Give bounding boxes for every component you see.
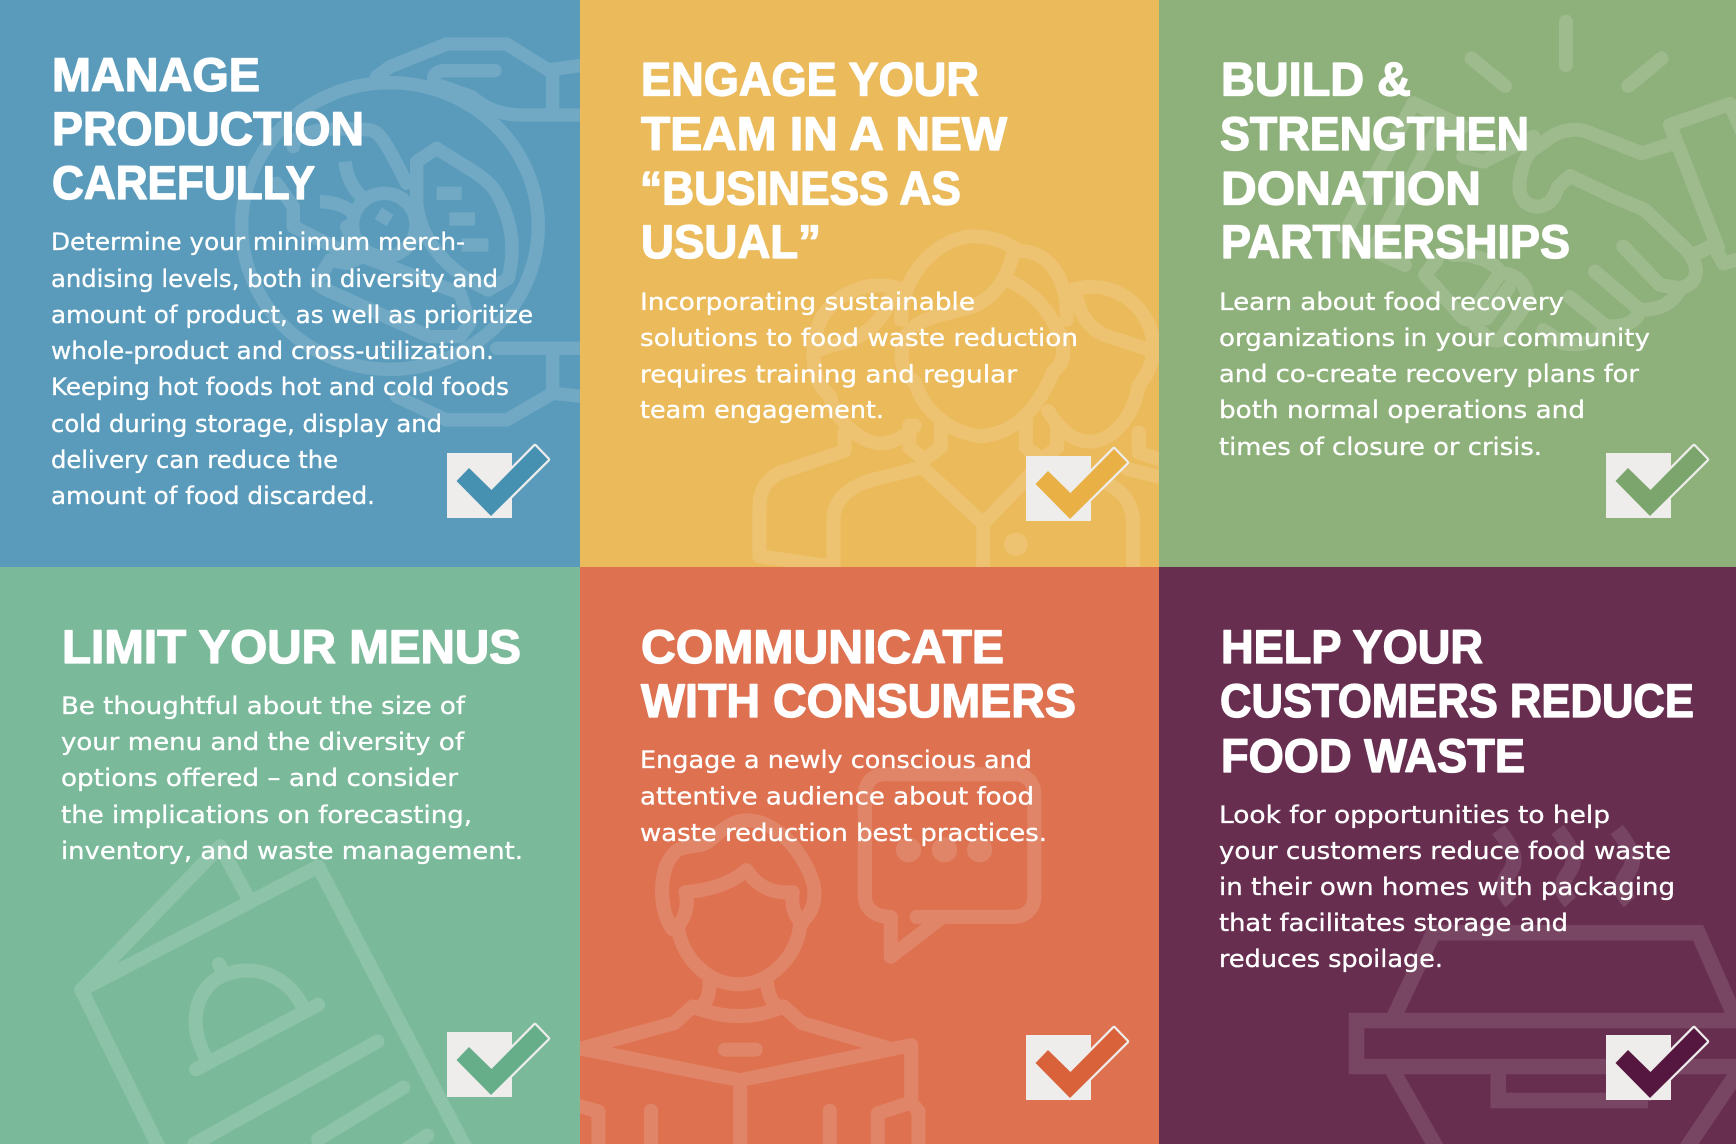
icon: check box bbox=[1606, 446, 1707, 518]
panel: manage production carefully bbox=[0, 0, 583, 567]
heading: LIMIT YOUR MENUS bbox=[62, 620, 521, 673]
heading: WITH CONSUMERS bbox=[641, 674, 1076, 727]
icon: check box bbox=[1026, 1028, 1127, 1100]
body text: reduces spoilage. bbox=[1219, 945, 1443, 973]
body text bbox=[640, 288, 1078, 424]
heading bbox=[640, 52, 1008, 268]
body text: requires training and regular bbox=[640, 360, 1017, 388]
body text: andising levels, both in diversity and bbox=[51, 265, 498, 293]
panel: help your customers reduce food waste bbox=[1159, 567, 1736, 1144]
heading: MANAGE bbox=[52, 48, 260, 101]
body text: times of closure or crisis. bbox=[1219, 433, 1542, 461]
body text: organizations in your community bbox=[1219, 324, 1650, 352]
icon: check box bbox=[447, 446, 548, 518]
body text: Be thoughtful about the size of bbox=[61, 692, 466, 720]
heading bbox=[1220, 620, 1694, 782]
body text: team engagement. bbox=[640, 396, 884, 424]
heading: TEAM IN A NEW bbox=[641, 107, 1008, 160]
icon: check box bbox=[1026, 449, 1127, 521]
heading: BUILD & bbox=[1221, 52, 1411, 106]
body text: Engage a newly conscious and bbox=[640, 746, 1032, 774]
body text bbox=[1219, 801, 1675, 973]
heading: USUAL” bbox=[641, 215, 821, 268]
heading bbox=[641, 620, 1076, 727]
icon: steaming food container bbox=[1357, 830, 1736, 1144]
heading: PARTNERSHIPS bbox=[1221, 215, 1570, 268]
body text: both normal operations and bbox=[1219, 396, 1585, 424]
body text: Incorporating sustainable bbox=[640, 288, 975, 316]
body text: Determine your minimum merch- bbox=[51, 228, 465, 256]
heading: FOOD WASTE bbox=[1221, 729, 1525, 782]
heading bbox=[1220, 52, 1570, 268]
icon: check box bbox=[1606, 1028, 1707, 1100]
body text: that facilitates storage and bbox=[1219, 909, 1568, 937]
icon: hands holding produce bbox=[242, 44, 583, 420]
body text: Look for opportunities to help bbox=[1219, 801, 1610, 829]
body text: cold during storage, display and bbox=[51, 410, 442, 438]
body text bbox=[51, 228, 533, 510]
body text: the implications on forecasting, bbox=[61, 801, 472, 829]
panel: limit your menus bbox=[0, 567, 580, 1144]
panel: communicate with consumers bbox=[573, 567, 1159, 1144]
icon: menu with cloche bbox=[81, 846, 477, 1144]
body text: your menu and the diversity of bbox=[61, 728, 465, 756]
body text: whole-product and cross-utilization. bbox=[51, 337, 494, 365]
heading bbox=[52, 48, 364, 209]
panel: build and strengthen donation partnerships bbox=[1159, 0, 1736, 567]
body text: amount of product, as well as prioritize bbox=[51, 301, 533, 329]
body text: amount of food discarded. bbox=[51, 482, 375, 510]
heading: COMMUNICATE bbox=[641, 620, 1004, 673]
icon: person with box and speech bubble bbox=[573, 774, 1034, 1144]
body text bbox=[1219, 288, 1650, 461]
panel: engage your team bbox=[580, 0, 1172, 582]
heading: HELP YOUR bbox=[1221, 620, 1483, 673]
body text bbox=[61, 692, 523, 865]
body text: in their own homes with packaging bbox=[1219, 873, 1675, 901]
body text: Keeping hot foods hot and cold foods bbox=[51, 373, 509, 401]
heading: PRODUCTION bbox=[52, 102, 364, 155]
icon: handshake bbox=[1343, 22, 1736, 344]
icon: check box bbox=[447, 1025, 548, 1097]
body text: delivery can reduce the bbox=[51, 446, 338, 474]
heading: DONATION bbox=[1221, 162, 1481, 214]
heading: ENGAGE YOUR bbox=[641, 52, 979, 106]
body text bbox=[640, 746, 1047, 847]
heading: CUSTOMERS REDUCE bbox=[1220, 674, 1694, 727]
body text: attentive audience about food bbox=[640, 782, 1034, 810]
body text: solutions to food waste reduction bbox=[640, 324, 1078, 352]
icon: team of people bbox=[759, 236, 1172, 582]
body text: inventory, and waste management. bbox=[61, 837, 523, 865]
body text: waste reduction best practices. bbox=[640, 819, 1047, 847]
body text: options offered – and consider bbox=[61, 764, 458, 792]
body text: Learn about food recovery bbox=[1219, 288, 1564, 316]
body text: and co-create recovery plans for bbox=[1219, 360, 1639, 388]
body text: your customers reduce food waste bbox=[1219, 837, 1671, 865]
heading: CAREFULLY bbox=[52, 156, 315, 209]
heading: “BUSINESS AS bbox=[640, 162, 961, 214]
heading: STRENGTHEN bbox=[1220, 107, 1529, 160]
